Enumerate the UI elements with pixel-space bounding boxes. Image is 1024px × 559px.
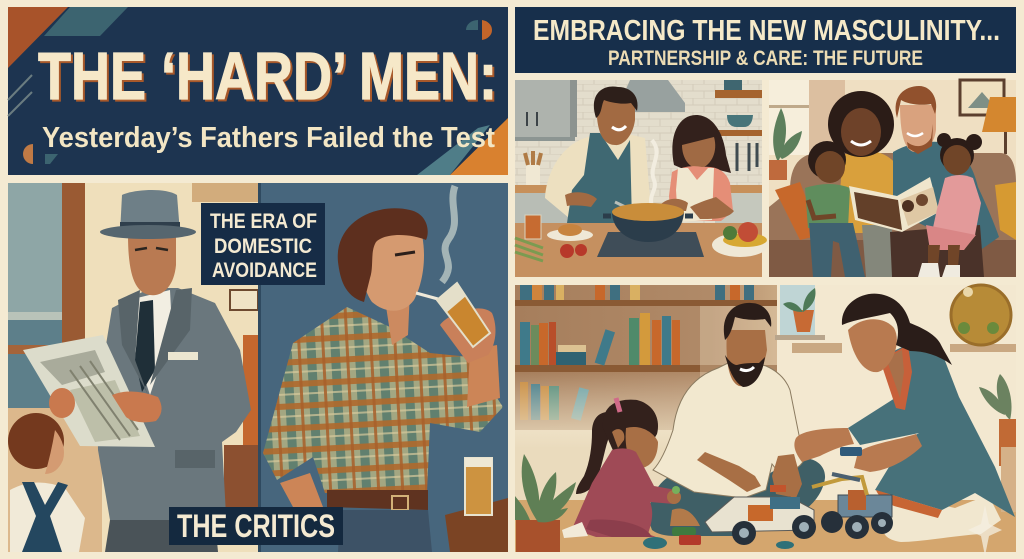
figure: toddler boy in green shirt <box>805 141 865 277</box>
figure: mother in teal kurta <box>794 294 1015 542</box>
figure: father <box>890 86 999 277</box>
label: the critics: THE CRITICS <box>177 508 335 544</box>
label: the era of domestic avoidance: DOMESTIC <box>214 235 312 258</box>
steam <box>651 140 657 206</box>
open photo book <box>849 177 939 232</box>
living room background <box>769 80 1016 277</box>
figure: toddler girl in pink dress <box>918 133 982 277</box>
figure: daughter in pink <box>562 398 681 538</box>
room background <box>515 285 1016 552</box>
figure: father with apron <box>545 86 650 223</box>
figure: father in kurta <box>649 303 825 536</box>
figure: man with plaid shirt and drink <box>263 208 503 552</box>
toy truck right <box>812 474 893 539</box>
panel: father and daughter cooking <box>515 80 768 277</box>
side table with beer <box>445 458 508 552</box>
kitchen background <box>515 80 762 225</box>
toy truck left <box>705 485 816 545</box>
smoke <box>442 186 455 282</box>
subtitle: Yesterday’s Fathers Failed the Test <box>42 122 495 154</box>
title: THE ‘HARD’ MEN: <box>40 41 499 116</box>
decorative corner shapes <box>8 7 508 175</box>
figure: girl with apron <box>660 115 734 222</box>
panel: family building toy trucks <box>515 285 1016 556</box>
panel: the critics illustration <box>8 183 508 552</box>
panel: right header <box>515 7 1016 73</box>
label: the era of domestic avoidance: AVOIDANCE <box>212 259 317 282</box>
loose toy bricks <box>643 447 862 549</box>
sparkle watermark <box>968 505 1002 556</box>
label: the era of domestic avoidance: THE ERA OF <box>210 210 317 233</box>
room background <box>8 183 508 552</box>
panel: family reading on sofa <box>769 80 1016 277</box>
label: the era of domestic avoidance <box>201 203 325 285</box>
plant on floor <box>515 454 576 552</box>
beer glass held <box>437 283 490 347</box>
right subheading: PARTNERSHIP & CARE: THE FUTURE <box>608 47 923 70</box>
figure: man in suit with newspaper <box>97 190 251 552</box>
title: THE ‘HARD’ MEN: <box>38 39 497 114</box>
figure: mother <box>828 91 897 277</box>
panel: left header <box>8 7 508 175</box>
counter with pot <box>515 203 768 277</box>
newspaper <box>23 335 162 447</box>
figure: boy with overalls <box>8 413 85 552</box>
